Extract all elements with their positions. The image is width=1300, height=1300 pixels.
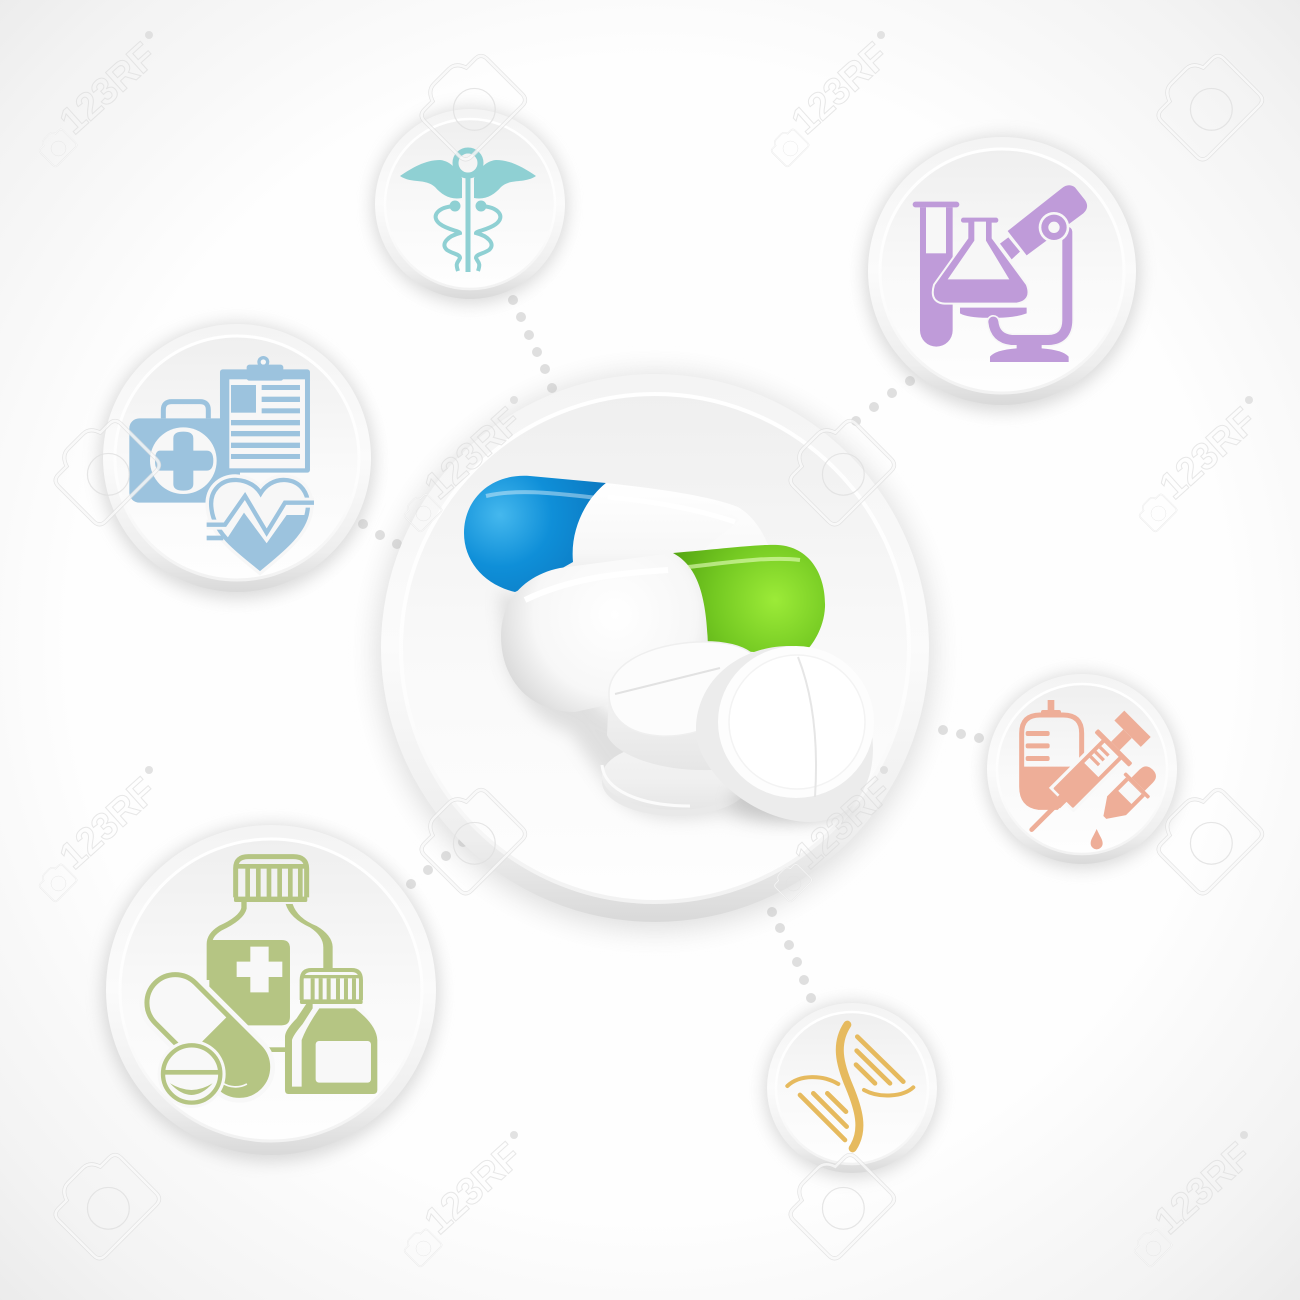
small bottle bbox=[285, 970, 377, 1094]
watermark row one: 123RF bbox=[784, 35, 897, 143]
panel: laboratory bbox=[864, 136, 1140, 412]
watermark row one: 123RF bbox=[52, 35, 165, 143]
watermark row two bbox=[45, 396, 1265, 532]
connector dots bbox=[358, 295, 984, 1003]
large bottle bbox=[209, 857, 333, 1052]
capsule: white and green bbox=[501, 545, 825, 712]
watermark row three: 123RF bbox=[52, 770, 165, 878]
capsule bbox=[135, 963, 279, 1107]
panel: medical records bbox=[99, 323, 375, 599]
icon: caduceus bbox=[400, 150, 536, 272]
panel: central plate with pills bbox=[377, 374, 933, 930]
clipboard bbox=[220, 356, 310, 473]
disc bbox=[864, 136, 1140, 412]
watermark row three: 123RF bbox=[787, 770, 900, 878]
capsule shadows bbox=[500, 590, 860, 824]
panel: DNA bbox=[764, 1002, 940, 1178]
panel: infusion and syringe bbox=[984, 673, 1180, 869]
watermark row three bbox=[36, 766, 1265, 902]
watermark row four: 123RF bbox=[417, 1135, 530, 1243]
icon: test tube, flask and microscope bbox=[913, 185, 1087, 362]
watermark row one bbox=[36, 31, 1265, 167]
panel: caduceus bbox=[372, 108, 568, 304]
tablet: bottom of stack bbox=[602, 742, 750, 816]
plate bbox=[377, 374, 933, 930]
watermark row four bbox=[45, 1131, 1260, 1267]
icon: drip bag, syringe and dropper bbox=[1013, 700, 1165, 849]
icon: kit, clipboard and heart bbox=[129, 356, 314, 573]
disc bbox=[99, 323, 375, 599]
disc bbox=[764, 1002, 940, 1178]
heart with pulse bbox=[207, 480, 314, 573]
panel: medicine bottles bbox=[102, 824, 440, 1162]
tablet bbox=[158, 1040, 226, 1108]
tablet: middle of stack bbox=[607, 642, 763, 770]
watermark row two: 123RF bbox=[417, 400, 530, 508]
first-aid kit bbox=[129, 402, 240, 503]
disc bbox=[102, 824, 440, 1162]
icon: DNA helix bbox=[787, 1025, 913, 1148]
watermark row two: 123RF bbox=[1152, 400, 1265, 508]
tablet: front leaning bbox=[696, 646, 874, 822]
disc bbox=[984, 673, 1180, 869]
icon: bottles, capsule and tablet bbox=[135, 857, 377, 1108]
watermark row four: 123RF bbox=[1147, 1135, 1260, 1243]
disc bbox=[372, 108, 568, 304]
capsule: blue and white bbox=[464, 476, 768, 640]
